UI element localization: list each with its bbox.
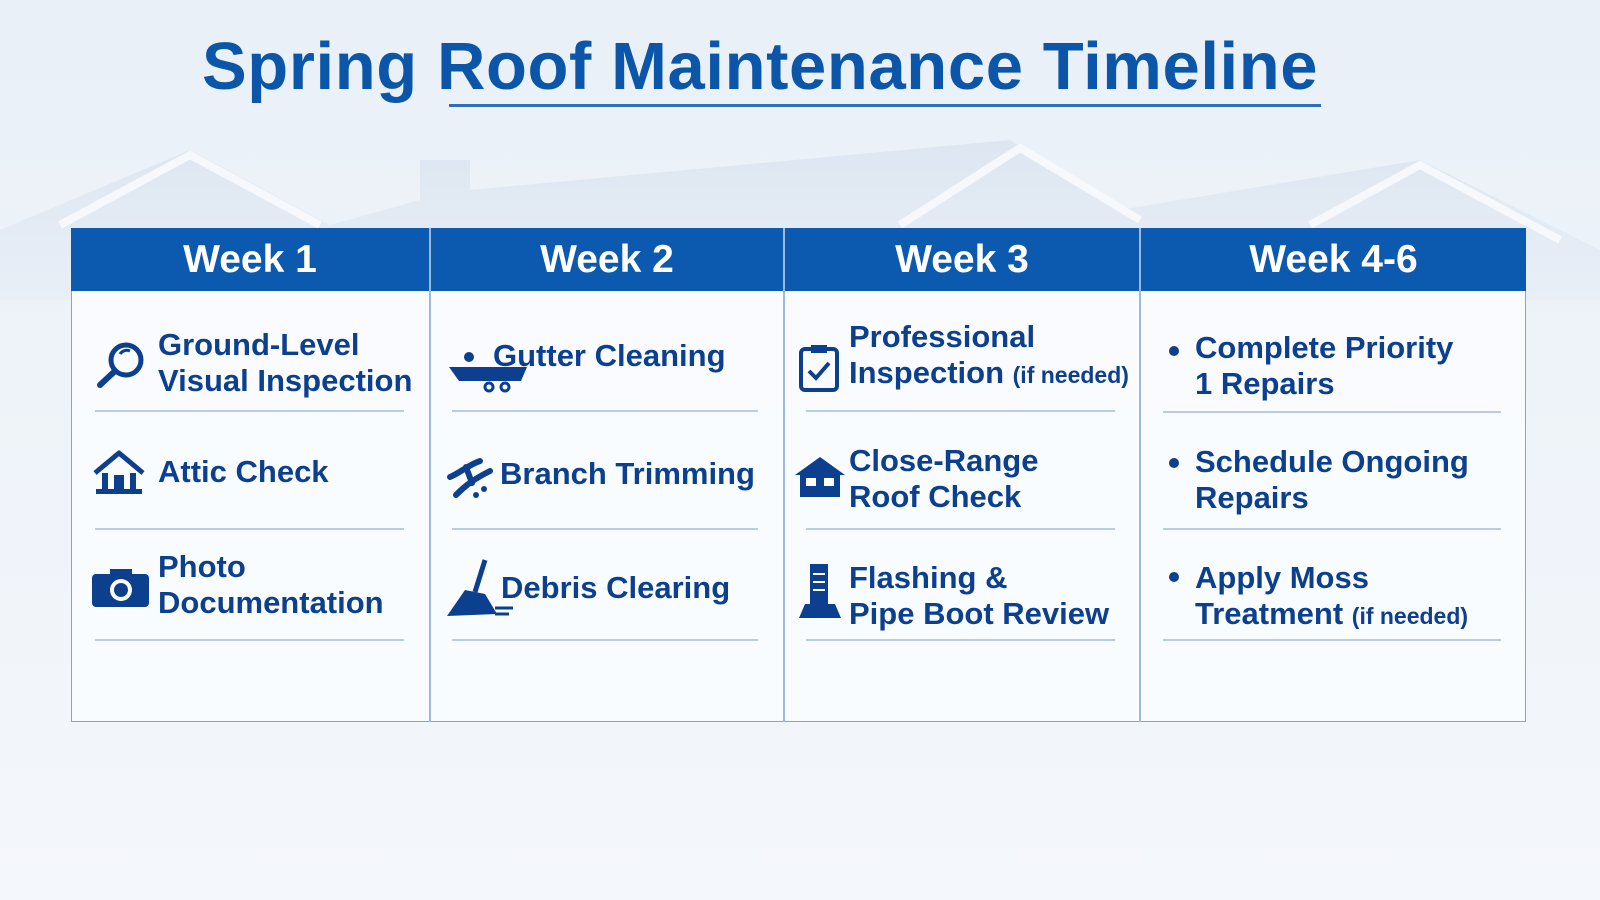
text: schedule ongoing repairs [1195, 444, 1469, 515]
icon: house [94, 450, 144, 494]
text: apply moss treatment: Apply Moss [1195, 560, 1369, 595]
text: ground-level visual inspection [158, 327, 412, 398]
text: ground-level visual inspection: Visual Inspection [158, 363, 412, 398]
text: schedule ongoing repairs: Repairs [1195, 480, 1309, 515]
title underline [449, 104, 1321, 107]
text: close-range roof check [849, 443, 1038, 514]
text: complete priority 1 repairs: Complete Priority [1195, 330, 1453, 365]
text: ground-level visual inspection: Ground-Level [158, 327, 360, 362]
text: branch trimming: Branch Trimming [500, 456, 755, 491]
text: photo documentation: Photo [158, 549, 246, 584]
text: apply moss treatment: Treatment (if needed) [1195, 596, 1468, 631]
text: flashing & pipe boot review [849, 560, 1110, 631]
header: week 2: Week 2 [540, 238, 674, 281]
text: photo documentation [158, 549, 384, 620]
text: schedule ongoing repairs: Schedule Ongoing [1195, 444, 1469, 479]
icon: camera [92, 569, 149, 607]
text: flashing & pipe boot review: Flashing & [849, 560, 1007, 595]
bullet 2 [1169, 458, 1179, 468]
title: Spring Roof Maintenance Timeline [202, 29, 1318, 104]
text: debris clearing: Debris Clearing [501, 570, 730, 605]
text: professional inspection: Professional [849, 319, 1035, 354]
text: photo documentation: Documentation [158, 585, 384, 620]
icon: broom [447, 559, 513, 616]
icon: pipe boot [799, 564, 841, 618]
icon: clipboard [799, 345, 839, 392]
text: gutter cleaning: Gutter Cleaning [493, 338, 726, 373]
text: complete priority 1 repairs [1195, 330, 1454, 401]
text: professional inspection: Inspection (if needed) [849, 355, 1129, 390]
text: apply moss treatment [1195, 560, 1468, 631]
header: week 4-6: Week 4-6 [1249, 238, 1418, 281]
icon: branch [447, 458, 494, 498]
text: attic check: Attic Check [158, 454, 329, 489]
text: flashing & pipe boot review: Pipe Boot Review [849, 596, 1109, 631]
icon: magnifier [97, 342, 144, 388]
header bar [71, 228, 1526, 291]
bullet 3 [1169, 572, 1179, 582]
text: close-range roof check: Close-Range [849, 443, 1038, 478]
header: week 3: Week 3 [895, 238, 1029, 281]
icon: house close-range [795, 457, 845, 497]
bullet 1 [1169, 346, 1179, 356]
text: complete priority 1 repairs: 1 Repairs [1195, 366, 1335, 401]
header: week 1: Week 1 [183, 238, 317, 281]
text: professional inspection [849, 319, 1129, 390]
table panel [71, 228, 1526, 722]
text: close-range roof check: Roof Check [849, 479, 1021, 514]
icon: gutter [449, 352, 527, 392]
